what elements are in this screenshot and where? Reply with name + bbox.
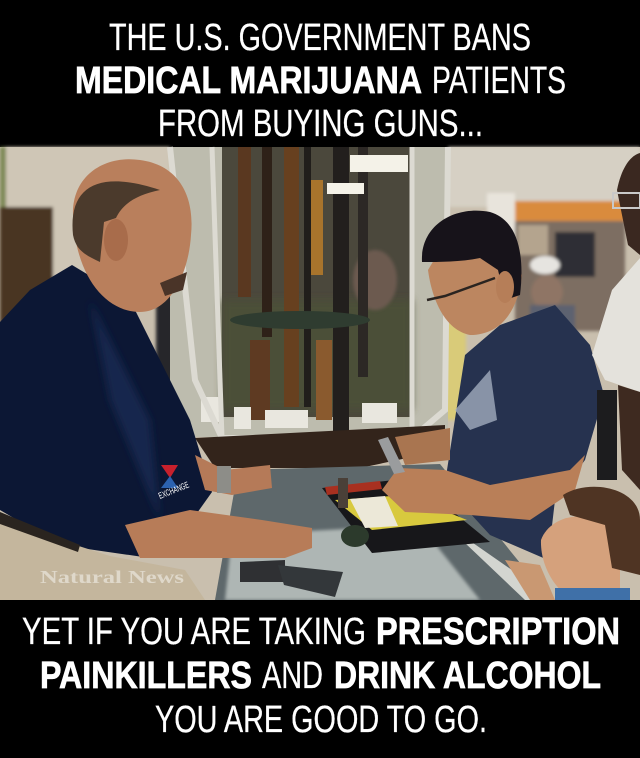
heading line 2: PATIENTS (432, 60, 566, 102)
clerk khaki trousers (0, 512, 205, 600)
heading line 3: FROM BUYING GUNS... (158, 103, 483, 145)
watermark: Natural News (40, 567, 184, 587)
clerk arm and hand (125, 510, 312, 558)
logo on sleeve (157, 465, 190, 501)
pistol (378, 437, 405, 474)
customer shirt (447, 305, 604, 560)
man left: store clerk (0, 159, 312, 600)
logo on sleeve: EXCHANGE (157, 480, 190, 501)
price tags (201, 397, 397, 429)
store wall and shelving (0, 147, 640, 420)
caption line 2 (40, 655, 601, 697)
customer head (428, 240, 522, 335)
clerk shirt (0, 265, 212, 558)
bottom black band with caption (0, 600, 640, 758)
rifles (230, 147, 370, 437)
safety mat on counter (322, 478, 490, 553)
young customer (378, 211, 604, 560)
customer arms (382, 455, 585, 520)
case frame (170, 147, 448, 438)
caption line 2: AND (262, 655, 323, 697)
photo: gun store counter scene (0, 147, 640, 600)
clerk head (73, 159, 192, 312)
caption line 1: YET IF YOU ARE TAKING (22, 611, 366, 653)
glass gun display case (170, 147, 448, 468)
caption line 3: YOU ARE GOOD TO GO. (155, 699, 487, 741)
man far right edge (592, 153, 640, 490)
child at right (505, 487, 640, 600)
glass counter (215, 464, 555, 600)
heading line 2: MEDICAL MARIJUANA (75, 60, 422, 102)
caption line 2: PAINKILLERS (40, 655, 252, 697)
top black band with heading (0, 0, 640, 147)
